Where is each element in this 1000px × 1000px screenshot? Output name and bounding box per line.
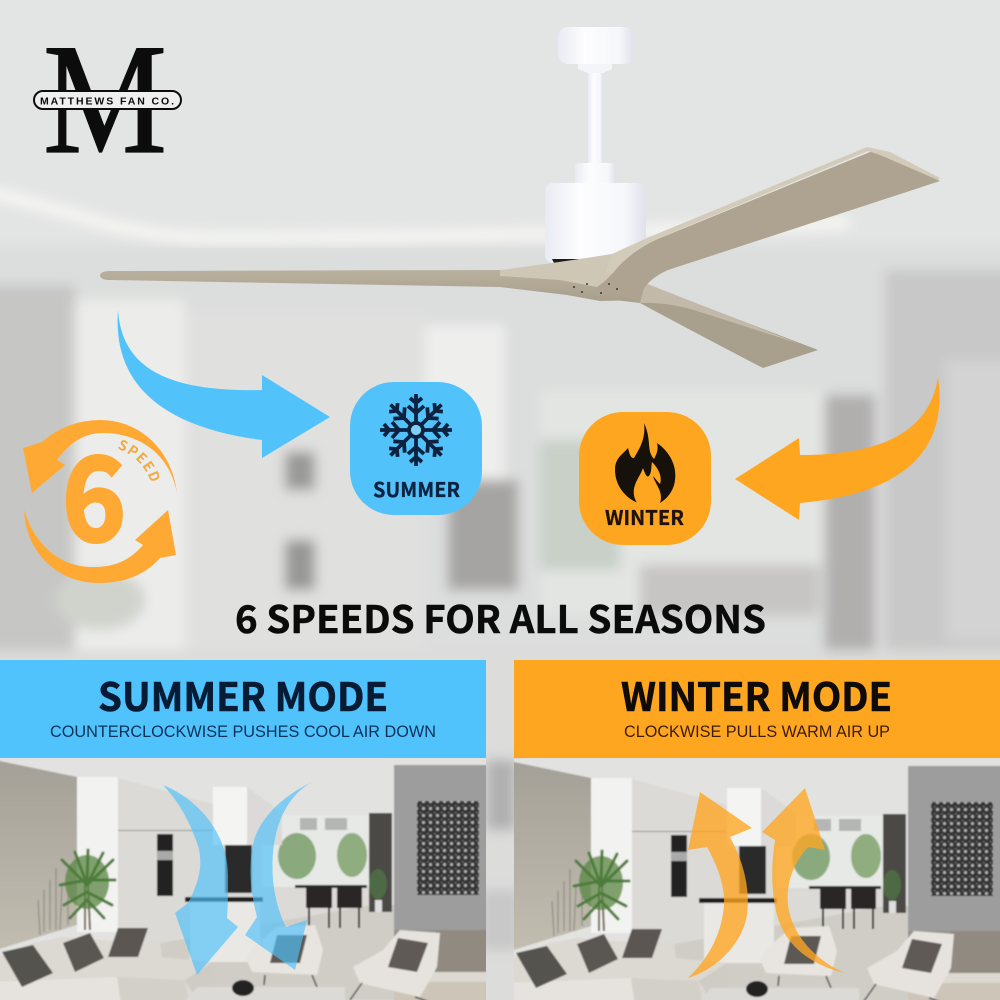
winter header [514,660,1000,758]
numeral 6: 6 [62,407,126,575]
summer room photo [0,750,496,1000]
summer header: SUMMER MODE [98,667,388,723]
summer label: SUMMER [373,473,460,503]
arrow: blue curved to summer [118,310,330,458]
speed label [118,440,160,481]
arrow: orange curved to winter [735,377,940,520]
panel: winter mode [504,660,1000,1000]
winter room photo [504,751,1000,1000]
bottom circular arrow [24,510,176,583]
fan blades [100,147,940,368]
summer header: COUNTERCLOCKWISE PUSHES COOL AIR DOWN [50,723,436,741]
logo: Matthews Fan Co.: M [43,12,167,187]
icon: summer card [350,382,482,515]
top circular arrow [23,420,177,493]
fan motor housing [545,163,646,263]
winter air arrows [688,788,845,978]
icon: snowflake [380,394,452,466]
icon: winter card [579,412,711,545]
icon: flame [615,423,675,503]
fan canopy and downrod [558,27,634,165]
winter header: WINTER MODE [621,667,892,723]
title: 6 SPEEDS FOR ALL SEASONS [235,589,766,644]
ceiling fan [100,27,940,368]
summer header [0,660,486,758]
summer air arrows [163,782,312,975]
winter label: WINTER [605,501,684,531]
winter header: CLOCKWISE PULLS WARM AIR UP [624,723,890,741]
logo: Matthews Fan Co.: MATTHEWS FAN CO. [40,96,174,108]
icon: 6 speed badge [23,407,177,583]
speed label: SPEED [118,440,160,481]
panel: summer mode [0,660,496,1000]
